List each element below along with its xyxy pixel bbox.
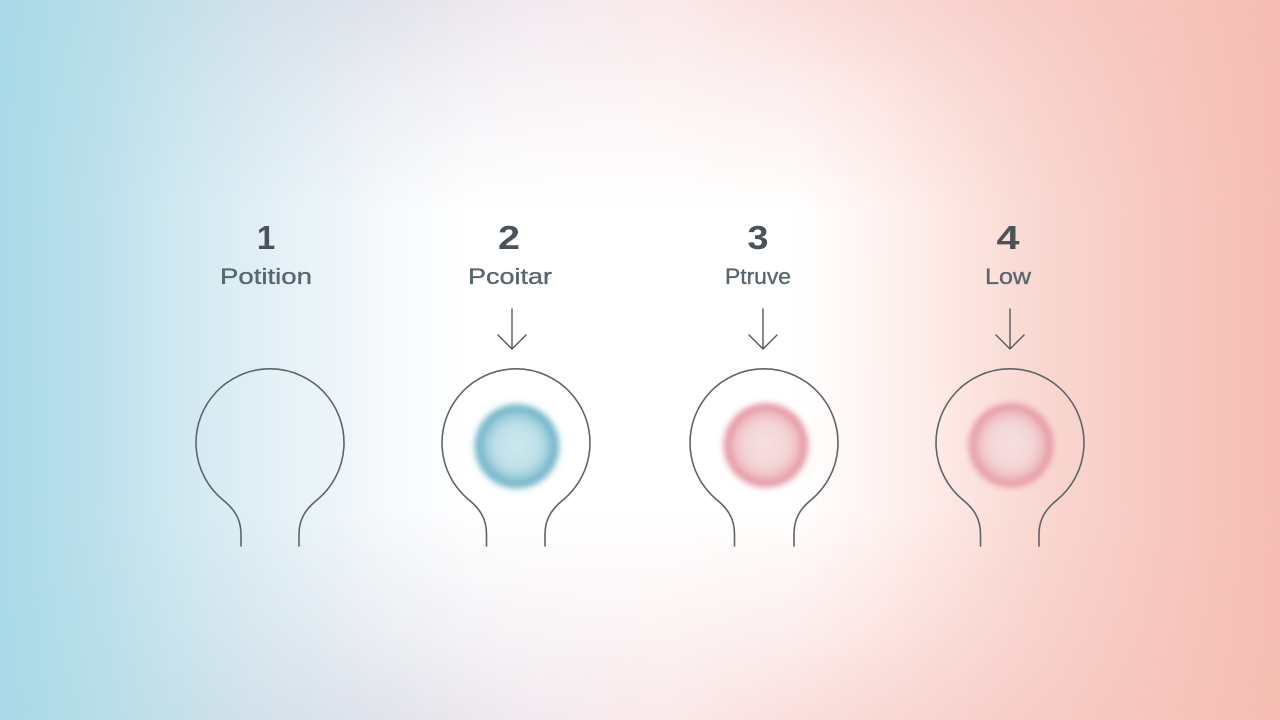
stage 4 bulb outline <box>936 369 1084 546</box>
stage 3 red spot <box>721 402 811 492</box>
stage 1 number: 1 <box>257 219 275 256</box>
stage 1 bulb outline <box>196 369 344 546</box>
stage 4 number: 4 <box>996 219 1020 256</box>
stage 2 blue spot <box>472 403 562 493</box>
stage 2 bulb outline <box>442 369 590 546</box>
stage 2 number: 2 <box>498 219 520 256</box>
stage 2 <box>442 219 590 546</box>
stage 4 arrow <box>996 309 1024 349</box>
stage 1 label: Potition <box>220 264 312 289</box>
stage 4 red spot <box>966 402 1056 492</box>
stage 2 arrow <box>498 309 526 349</box>
stage 4 <box>936 219 1084 546</box>
stage 3 number: 3 <box>748 219 768 256</box>
stage 2 label: Pcoitar <box>468 264 552 289</box>
stage 3 label: Ptruve <box>725 264 791 289</box>
stage 1 <box>196 219 344 546</box>
stage 3 <box>690 219 838 546</box>
stage 4 label: Low <box>985 264 1031 289</box>
stage 3 arrow <box>749 309 777 349</box>
stage 3 bulb outline <box>690 369 838 546</box>
